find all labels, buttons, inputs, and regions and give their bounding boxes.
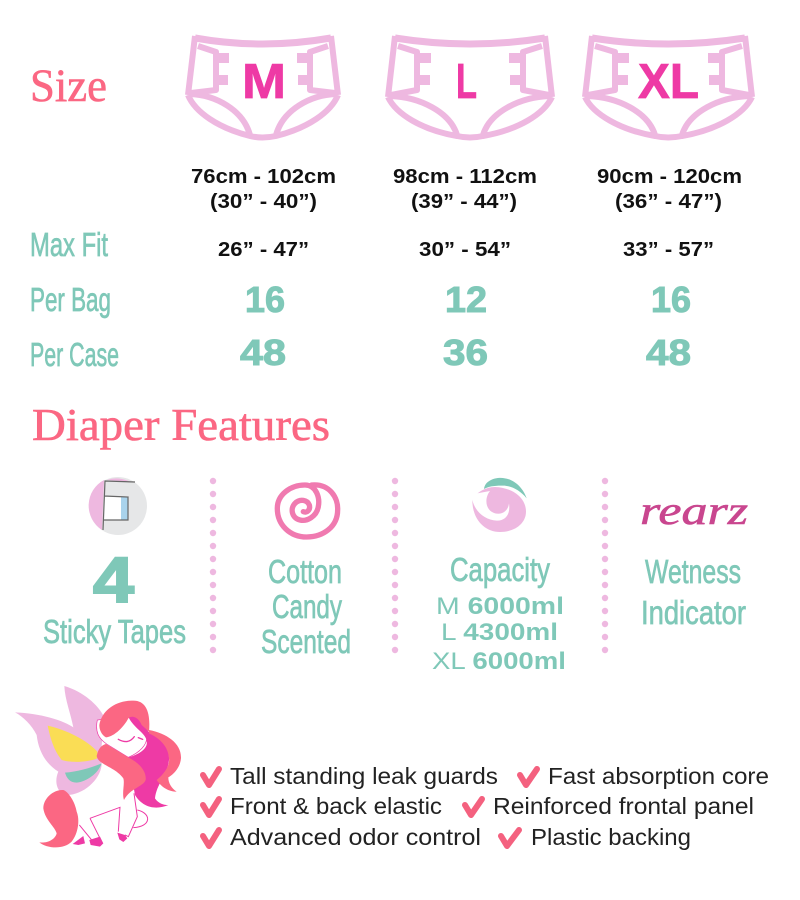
row: max fit [30, 226, 714, 263]
size letter L: L [456, 55, 477, 109]
size letters XL: XL [638, 55, 699, 109]
item: reinforced frontal panel: Reinforced frontal panel [493, 793, 754, 819]
per case M: 48 [240, 332, 286, 373]
icon: extra large diaper [585, 36, 752, 138]
item: advanced odor control: Advanced odor control [230, 824, 481, 850]
row: per case [30, 332, 691, 373]
feature: sticky tapes [43, 477, 186, 650]
icon: swirl [468, 478, 527, 532]
item: front and back elastic: Front & back elastic [230, 793, 442, 819]
item: tall standing leak guards: Tall standing leak guards [230, 763, 498, 789]
feature checklist [203, 763, 769, 850]
logo: rearz: rearz [640, 488, 749, 533]
label: Candy: Candy [272, 588, 342, 625]
label: Cotton: Cotton [268, 553, 342, 590]
illustration: winged unicorn [15, 686, 181, 847]
label: Sticky Tapes: Sticky Tapes [43, 613, 186, 650]
per bag XL: 16 [651, 279, 691, 320]
icon: medium diaper [188, 36, 338, 138]
waist XL inches: (36” - 47”) [615, 191, 722, 213]
capacity XL: XL 6000ml [432, 648, 566, 675]
label: Capacity: Capacity [450, 551, 550, 588]
item: fast absorption core: Fast absorption core [548, 763, 769, 789]
per bag M: 16 [245, 279, 285, 320]
waist L: 98cm - 112cm [393, 166, 537, 188]
number 4: 4 [93, 544, 134, 616]
waist sizes [191, 166, 742, 213]
feature: wetness indicator [640, 488, 749, 631]
per case L: 36 [443, 332, 488, 373]
heading: Size: Size [30, 60, 107, 112]
item: plastic backing: Plastic backing [531, 824, 691, 850]
label: Scented: Scented [261, 623, 351, 660]
icon: large diaper [388, 36, 552, 138]
max fit L: 30” - 54” [419, 239, 511, 261]
per case XL: 48 [646, 332, 691, 373]
label: Wetness: Wetness [645, 553, 741, 590]
waist M inches: (30” - 40”) [210, 191, 317, 213]
size letter M: M [242, 55, 286, 109]
per bag L: 12 [445, 279, 487, 320]
row: per bag [30, 279, 691, 320]
capacity M: M 6000ml [436, 593, 564, 620]
label: Per Bag: Per Bag [30, 281, 111, 318]
capacity L: L 4300ml [441, 619, 558, 646]
feature: cotton candy scent [261, 485, 351, 660]
label: Max Fit: Max Fit [30, 226, 108, 263]
icon: candy spiral [277, 485, 338, 537]
label: Per Case: Per Case [30, 336, 119, 373]
waist L inches: (39” - 44”) [411, 191, 517, 213]
max fit M: 26” - 47” [218, 239, 309, 261]
feature: capacity [432, 478, 566, 675]
waist M: 76cm - 102cm [191, 166, 336, 188]
icon: tape [89, 477, 147, 535]
heading: Diaper Features: Diaper Features [32, 399, 330, 450]
label: Indicator: Indicator [641, 594, 746, 631]
waist XL: 90cm - 120cm [597, 166, 742, 188]
max fit XL: 33” - 57” [623, 239, 714, 261]
